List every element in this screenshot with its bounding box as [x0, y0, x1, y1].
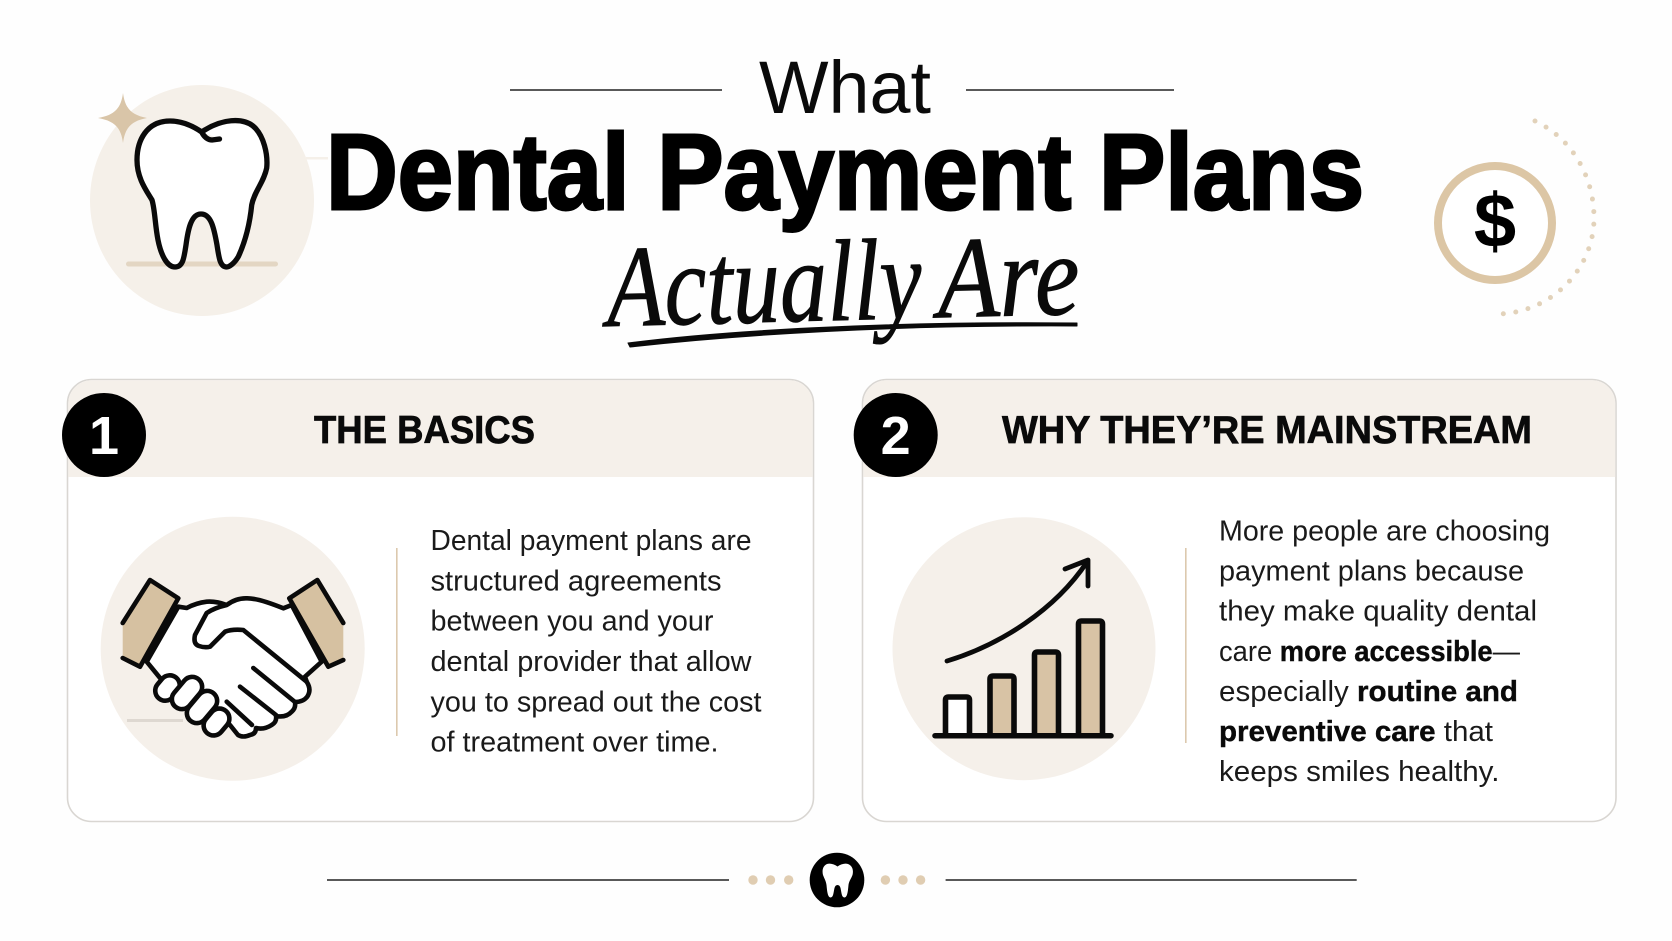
heading: the basics: THE BASICS [314, 409, 535, 452]
body text: why they're mainstream: payment plans because [1219, 556, 1524, 588]
body text: the basics: you to spread out the cost [430, 686, 762, 718]
body text: the basics [430, 525, 762, 759]
body text: the basics: Dental payment plans are [430, 525, 752, 557]
body text: why they're mainstream: preventive care that [1219, 716, 1493, 748]
right cuff [289, 580, 343, 667]
title line: Dental Payment Plans: Dental Payment Plans [326, 111, 1364, 232]
heading: why they're mainstream: WHY THEY’RE MAINSTREAM [1002, 409, 1532, 452]
panel header band [863, 380, 1615, 477]
thumb and knuckle line [194, 605, 307, 682]
body text: why they're mainstream: keeps smiles healthy. [1219, 756, 1500, 788]
finger creases [227, 668, 295, 725]
script subtitle: Actually Are: Are [930, 212, 1081, 344]
panel header band [68, 380, 813, 477]
number badge 2 [854, 393, 938, 477]
body text: the basics: structured agreements [430, 565, 722, 597]
number badge 2: 2 [881, 406, 911, 466]
body text: why they're mainstream [1219, 516, 1550, 788]
finger capsules [151, 671, 233, 740]
body text: why they're mainstream: care more accessible— [1219, 636, 1520, 668]
brush underline [628, 323, 1077, 347]
icon: dollar coin with dotted arc: $ [1474, 179, 1516, 264]
footer divider with tooth badge [327, 853, 1357, 907]
body text: the basics: dental provider that allow [430, 646, 752, 678]
body text: why they're mainstream: especially routine and [1219, 676, 1518, 708]
hand silhouette [147, 598, 322, 736]
icon: dollar coin with dotted arc [1438, 121, 1594, 314]
body text: why they're mainstream: More people are choosing [1219, 516, 1550, 548]
icon: small tooth badge [810, 853, 864, 907]
panel: why they're mainstream [854, 380, 1616, 822]
bars [946, 621, 1102, 735]
growth arrow [947, 560, 1088, 661]
title line: What: What [759, 46, 931, 129]
body text: the basics: of treatment over time. [430, 727, 718, 759]
number badge 1 [62, 393, 146, 477]
left cuff [123, 580, 178, 667]
body text: the basics: between you and your [430, 606, 714, 638]
icon: rising bar chart [892, 517, 1156, 780]
number badge 1: 1 [89, 406, 119, 466]
icon: tooth with sparkle [90, 85, 328, 316]
script subtitle: Actually Are: Actually [599, 216, 924, 352]
body text: why they're mainstream: they make quality dental [1219, 596, 1537, 628]
panel: the basics [62, 380, 814, 822]
icon: handshake [101, 517, 365, 781]
title block [326, 46, 1364, 352]
